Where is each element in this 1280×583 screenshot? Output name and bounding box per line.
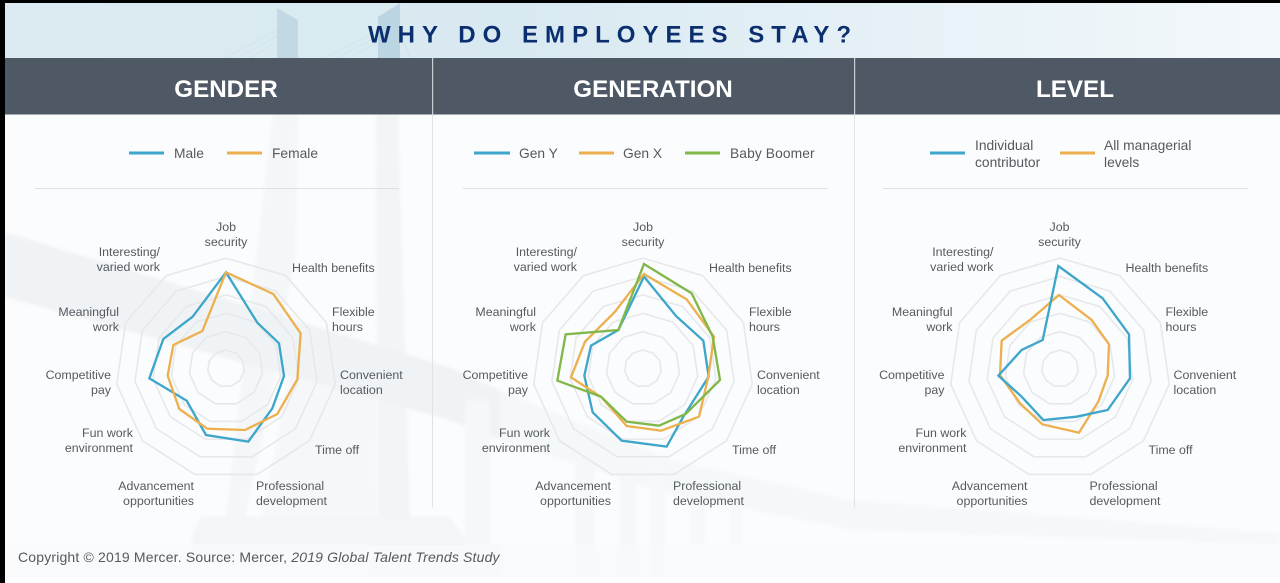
legend: level: All managerial — [1104, 138, 1191, 153]
axis labels: generation — [463, 220, 820, 508]
axis labels: level — [879, 220, 1237, 508]
axis labels: gender: Competitive — [46, 368, 111, 382]
series: gen y — [584, 277, 709, 447]
axis labels: level: development — [1090, 494, 1161, 508]
axis labels: level: Time off — [1148, 443, 1193, 457]
radar chart: gender — [46, 220, 403, 508]
legend: level: contributor — [975, 155, 1041, 170]
axis labels: generation: environment — [482, 441, 551, 455]
panel: gender — [5, 58, 432, 508]
series: male — [149, 272, 284, 442]
series: gen x — [571, 274, 714, 431]
axis labels: gender: Fun work — [82, 426, 134, 440]
legend: gender — [129, 146, 318, 161]
series: female — [168, 272, 301, 430]
axis labels: level: security — [1038, 235, 1082, 249]
axis labels: generation: Interesting/ — [516, 245, 578, 259]
axis labels: level: Professional — [1090, 479, 1158, 493]
axis labels: level: work — [925, 320, 953, 334]
axis labels: gender: varied work — [97, 260, 161, 274]
panel: level — [855, 58, 1280, 508]
axis labels: level: Interesting/ — [932, 245, 994, 259]
axis labels: generation: security — [622, 235, 665, 249]
axis labels: generation: hours — [749, 320, 780, 334]
axis labels: generation: Fun work — [499, 426, 551, 440]
radar chart: level — [879, 220, 1237, 508]
axis labels: generation: Job — [633, 220, 653, 234]
axis labels: generation: location — [757, 383, 800, 397]
axis labels: level: Meaningful — [892, 305, 952, 319]
axis labels: level: Job — [1050, 220, 1070, 234]
axis labels: level: location — [1174, 383, 1216, 397]
axis labels: level: environment — [898, 441, 967, 455]
axis labels: gender: opportunities — [123, 494, 194, 508]
axis labels: level: Health benefits — [1126, 261, 1208, 275]
axis labels: level: Advancement — [952, 479, 1028, 493]
axis labels: gender: development — [256, 494, 328, 508]
axis labels: gender: location — [340, 383, 383, 397]
axis labels: generation: Competitive — [463, 368, 528, 382]
axis labels: generation: Advancement — [535, 479, 612, 493]
axis labels: gender: Health benefits — [292, 261, 375, 275]
axis labels: gender: Professional — [256, 479, 324, 493]
axis labels: generation: Meaningful — [475, 305, 536, 319]
heading band: generation — [433, 58, 854, 114]
heading band: level: LEVEL — [1036, 76, 1114, 103]
axis labels: gender: Interesting/ — [99, 245, 161, 259]
legend: gender: Female — [272, 146, 318, 161]
legend: level — [930, 138, 1191, 170]
axis labels: generation: Convenient — [757, 368, 820, 382]
axis labels: generation: work — [509, 320, 537, 334]
axis labels: gender: environment — [65, 441, 134, 455]
axis labels: level: Fun work — [916, 426, 967, 440]
axis labels: generation: Professional — [673, 479, 741, 493]
axis labels: gender: hours — [332, 320, 363, 334]
axis labels: generation: Flexible — [749, 305, 792, 319]
axis labels: level: Convenient — [1174, 368, 1237, 382]
axis labels: gender: pay — [91, 383, 112, 397]
legend: level: Individual — [975, 138, 1033, 153]
axis labels: level: Flexible — [1166, 305, 1208, 319]
heading band: level — [855, 58, 1280, 114]
axis labels: gender — [46, 220, 403, 508]
axis labels: gender: work — [92, 320, 120, 334]
axis labels: level: hours — [1166, 320, 1196, 334]
axis labels: gender: Meaningful — [58, 305, 119, 319]
axis labels: gender: Job — [216, 220, 236, 234]
legend: level: levels — [1104, 155, 1139, 170]
axis labels: gender: Convenient — [340, 368, 403, 382]
axis labels: gender: security — [205, 235, 248, 249]
axis labels: level: varied work — [930, 260, 994, 274]
heading band: gender — [5, 58, 432, 114]
axis labels: generation: Health benefits — [709, 261, 792, 275]
radar chart: generation — [463, 220, 820, 508]
legend: generation: Gen X — [623, 146, 662, 161]
legend: generation: Baby Boomer — [730, 146, 815, 161]
axis labels: level: pay — [925, 383, 945, 397]
axis labels: gender: Time off — [315, 443, 360, 457]
panel: generation — [433, 58, 854, 508]
heading band: gender: GENDER — [174, 76, 278, 103]
axis labels: generation: Time off — [732, 443, 777, 457]
axis labels: gender: Advancement — [118, 479, 195, 493]
axis labels: generation: pay — [508, 383, 529, 397]
series: baby boomer — [557, 264, 720, 426]
series: individual contributor — [998, 266, 1130, 420]
title: WHY DO EMPLOYEES STAY? — [368, 22, 858, 48]
axis labels: generation: opportunities — [540, 494, 611, 508]
legend: gender: Male — [174, 146, 204, 161]
axis labels: level: opportunities — [957, 494, 1028, 508]
axis labels: generation: development — [673, 494, 745, 508]
axis labels: level: Competitive — [879, 368, 945, 382]
legend: generation — [474, 146, 815, 161]
legend: generation: Gen Y — [519, 146, 558, 161]
series: all managerial levels — [1000, 295, 1109, 433]
axis labels: gender: Flexible — [332, 305, 375, 319]
heading band: generation: GENERATION — [573, 76, 733, 103]
copyright and source note: Copyright © 2019 Mercer. Source: Mercer, 2019 Global Talent Trends Study — [18, 549, 501, 565]
axis labels: generation: varied work — [514, 260, 578, 274]
